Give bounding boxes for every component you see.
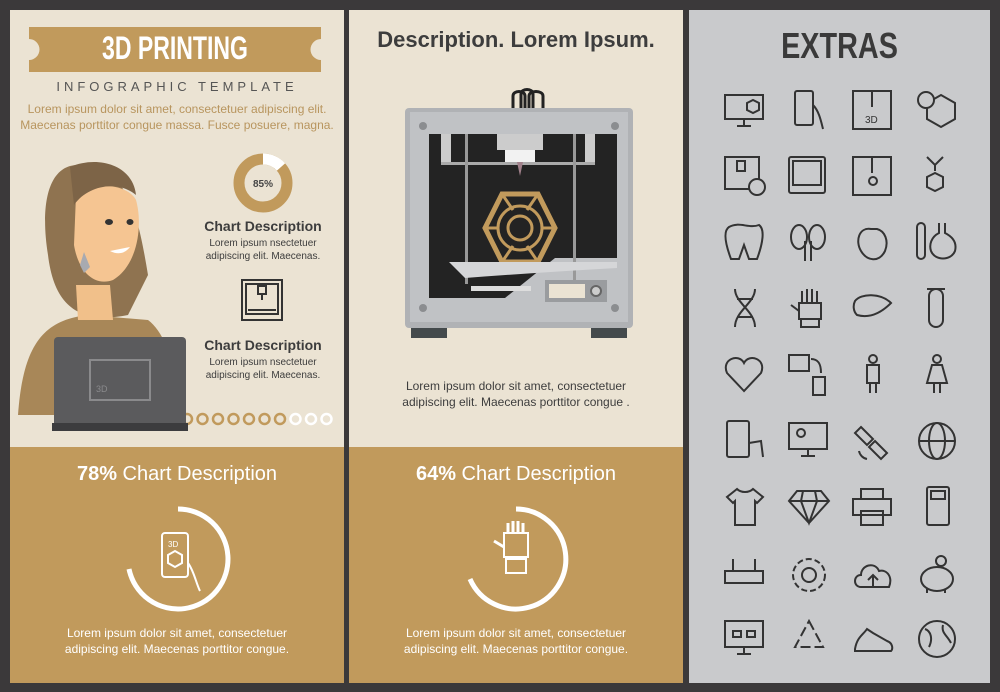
heading 64%: 64% Chart Description xyxy=(416,463,616,485)
title banner xyxy=(29,27,321,72)
illustration: woman with laptop xyxy=(18,162,188,431)
subtitle: INFOGRAPHIC TEMPLATE xyxy=(56,79,298,94)
bottom text: adipiscing elit. Maecenas porttitor congue. xyxy=(65,642,289,656)
ring chart with hand icon xyxy=(468,506,568,612)
icon grid: 3D xyxy=(865,115,878,126)
description text xyxy=(402,379,630,409)
icon grid xyxy=(724,90,956,658)
intro text: Lorem ipsum dolor sit amet, consectetuer adipiscing elit. xyxy=(28,102,326,116)
illustration: woman with laptop: 3D xyxy=(96,384,108,394)
chart description 2 xyxy=(204,337,322,381)
heading 78%: 78% Chart Description xyxy=(77,463,277,485)
chart description 2: Lorem ipsum nsectetuer xyxy=(209,357,317,368)
bottom text: adipiscing elit. Maecenas porttitor congue. xyxy=(404,642,628,656)
panel: left bottom xyxy=(10,447,344,683)
bottom text xyxy=(65,626,289,656)
intro text: Maecenas porttitor congue massa. Fusce posuere, magna. xyxy=(20,118,334,132)
chart description 1 xyxy=(204,218,322,262)
chart description 1: adipiscing elit. Maecenas. xyxy=(206,251,320,262)
chart description 1: Chart Description xyxy=(204,218,322,234)
bottom text: Lorem ipsum dolor sit amet, consectetuer xyxy=(406,626,626,640)
chart description 2: adipiscing elit. Maecenas. xyxy=(206,370,320,381)
bottom text: Lorem ipsum dolor sit amet, consectetuer xyxy=(67,626,287,640)
panel: extras xyxy=(689,10,990,683)
chart description 2: Chart Description xyxy=(204,337,322,353)
bottom text xyxy=(404,626,628,656)
title banner: 3D PRINTING xyxy=(102,30,248,66)
heading: Description. Lorem Ipsum. xyxy=(377,27,655,52)
panel: middle top xyxy=(349,10,683,447)
ring chart with phone icon: 3D xyxy=(168,540,178,549)
donut 85% xyxy=(234,154,292,212)
icon: printer xyxy=(241,279,283,321)
chart description 1: Lorem ipsum nsectetuer xyxy=(209,238,317,249)
progress dots xyxy=(186,412,333,426)
illustration: 3D printer xyxy=(405,88,633,338)
donut 85%: 85% xyxy=(253,179,273,190)
heading extras: EXTRAS xyxy=(781,25,898,66)
intro text xyxy=(20,102,334,132)
panel: middle bottom xyxy=(349,447,683,683)
description text: Lorem ipsum dolor sit amet, consectetuer xyxy=(406,379,626,393)
ring chart with phone icon xyxy=(126,506,230,612)
panel: left top xyxy=(10,10,344,447)
description text: adipiscing elit. Maecenas porttitor congue . xyxy=(402,395,630,409)
